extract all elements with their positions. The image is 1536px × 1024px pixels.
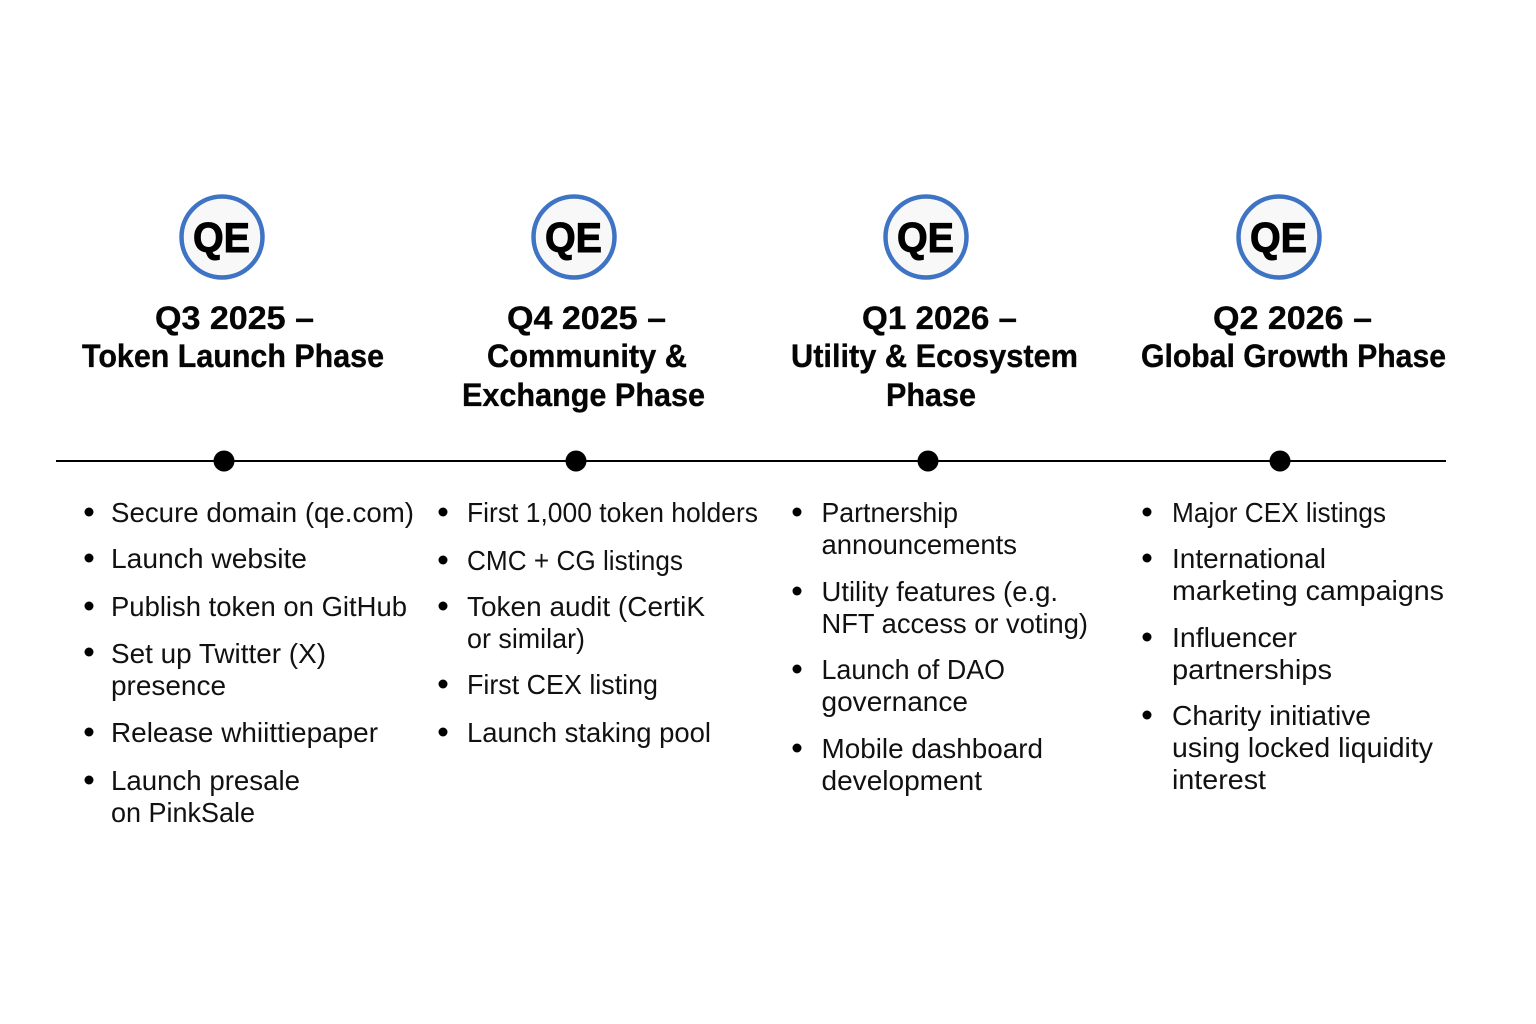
list: Q2 2026 tasks: Charity initiative [1172, 700, 1371, 731]
list: Q4 2025 tasks: Launch staking pool [467, 717, 711, 748]
list: Q3 2025 tasks: Release whiittiepaper [111, 717, 378, 748]
list: Q2 2026 tasks: marketing campaigns [1172, 575, 1444, 606]
list: Q3 2025 tasks: Set up Twitter (X) [111, 638, 326, 669]
heading: Q4 2025: Q4 2025 – [507, 300, 666, 336]
list: Q2 2026 tasks: Influencer [1172, 622, 1297, 653]
icon: QE logo [886, 196, 966, 278]
heading: Q1 2026: Phase [886, 377, 976, 413]
list: Q3 2025 tasks: Launch website [111, 543, 307, 574]
list: Q1 2026 tasks [792, 497, 1088, 796]
heading: Q3 2025: Q3 2025 – [155, 300, 314, 336]
list: Q3 2025 tasks: Launch presale [111, 765, 300, 796]
list: Q4 2025 tasks: Token audit (CertiK [467, 591, 706, 622]
heading: Q2 2026: Q2 2026 – [1213, 300, 1372, 336]
panel: Q4 2025 [438, 196, 758, 748]
list: Q3 2025 tasks: presence [111, 670, 226, 701]
heading: Q1 2026 [791, 300, 1078, 413]
panel: Q3 2025 [82, 196, 414, 828]
heading: Q1 2026: Utility & Ecosystem [791, 338, 1078, 374]
list: Q1 2026 tasks: Mobile dashboard [822, 733, 1043, 764]
list: Q1 2026 tasks: Launch of DAO [822, 654, 1005, 685]
list: Q1 2026 tasks: development [822, 765, 982, 796]
list: Q4 2025 tasks: First CEX listing [467, 669, 658, 700]
heading: Q2 2026: Global Growth Phase [1141, 338, 1446, 374]
list: Q3 2025 tasks [84, 497, 414, 828]
list: Q2 2026 tasks: International [1172, 543, 1326, 574]
heading: Q1 2026: Q1 2026 – [862, 300, 1017, 336]
list: Q2 2026 tasks: interest [1172, 764, 1266, 795]
timeline [56, 450, 1446, 472]
heading: Q4 2025 [462, 300, 705, 413]
icon: QE logo [182, 196, 262, 278]
list: Q2 2026 tasks [1142, 497, 1444, 795]
list: Q4 2025 tasks: or similar) [467, 623, 585, 654]
icon: QE logo: QE [545, 214, 602, 261]
list: Q2 2026 tasks: using locked liquidity [1172, 732, 1433, 763]
heading: Q4 2025: Exchange Phase [462, 377, 705, 413]
icon: QE logo [534, 196, 614, 278]
list: Q4 2025 tasks: CMC + CG listings [467, 545, 683, 576]
panel: Q2 2026 [1141, 196, 1446, 795]
heading: Q2 2026 [1141, 300, 1446, 374]
heading: Q3 2025: Token Launch Phase [82, 338, 384, 374]
list: Q1 2026 tasks: Utility features (e.g. [822, 576, 1058, 607]
list: Q2 2026 tasks: Major CEX listings [1172, 497, 1386, 528]
list: Q3 2025 tasks: Publish token on GitHub [111, 591, 407, 622]
heading: Q4 2025: Community & [487, 338, 687, 374]
icon: QE logo: QE [193, 214, 250, 261]
icon: QE logo: QE [897, 214, 954, 261]
icon: QE logo: QE [1250, 214, 1307, 261]
list: Q1 2026 tasks: Partnership [822, 497, 958, 528]
list: Q3 2025 tasks: on PinkSale [111, 797, 255, 828]
icon: QE logo [1238, 196, 1320, 278]
list: Q3 2025 tasks: Secure domain (qe.com) [111, 497, 414, 528]
list: Q4 2025 tasks [438, 497, 758, 748]
list: Q2 2026 tasks: partnerships [1172, 654, 1332, 685]
panel: Q1 2026 [791, 196, 1088, 796]
heading: Q3 2025 [82, 300, 384, 374]
list: Q1 2026 tasks: governance [822, 686, 968, 717]
list: Q1 2026 tasks: NFT access or voting) [822, 608, 1088, 639]
list: Q1 2026 tasks: announcements [822, 529, 1017, 560]
list: Q4 2025 tasks: First 1,000 token holders [467, 497, 758, 528]
